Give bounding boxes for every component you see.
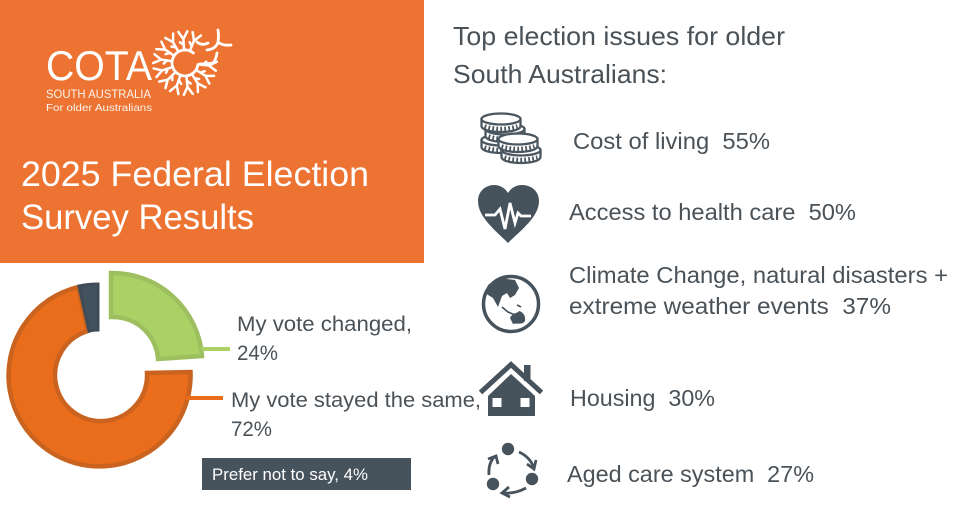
slice: prefer not to say: [79, 284, 98, 331]
icon: coins: [482, 114, 540, 163]
heading: top issues: Top election issues for older: [453, 21, 785, 51]
text: climate change: extreme weather events 37%: [569, 293, 891, 319]
COTA logo: [46, 30, 231, 114]
title: Survey Results: [21, 198, 254, 237]
slice: vote stayed the same: [9, 287, 191, 466]
icon: house: [480, 364, 542, 416]
logo subtitle: SOUTH AUSTRALIA: [46, 89, 151, 101]
text: cost of living: Cost of living 55%: [573, 128, 770, 154]
logo tagline: For older Australians: [46, 102, 152, 114]
icon: heart with pulse: [478, 185, 539, 243]
heading: top issues: South Australians:: [453, 59, 667, 89]
logo wordmark: COTA: [46, 42, 152, 89]
text: access to health care: Access to health care 50%: [569, 199, 856, 225]
text: aged care system: Aged care system 27%: [567, 461, 814, 487]
label: vote stayed the same: 72%: [231, 417, 272, 441]
icon: cycle: [487, 443, 538, 497]
donut chart: [9, 273, 202, 466]
leader line: vote changed: [201, 347, 230, 351]
label: prefer not to say: [202, 458, 411, 490]
slice: vote changed: [111, 273, 202, 359]
text: climate change: Climate Change, natural disasters +: [569, 262, 948, 288]
label: prefer not to say: Prefer not to say, 4%: [212, 465, 368, 484]
icon: globe: [484, 276, 538, 332]
title: 2025 Federal Election: [21, 155, 369, 194]
text: housing: Housing 30%: [570, 385, 715, 411]
label: vote changed: 24%: [237, 341, 278, 365]
label: vote stayed the same: My vote stayed the same,: [231, 388, 481, 412]
logo emblem: [153, 30, 231, 95]
label: vote changed: My vote changed,: [237, 312, 412, 336]
orange header panel: [0, 0, 424, 263]
leader line: same: [186, 396, 223, 400]
